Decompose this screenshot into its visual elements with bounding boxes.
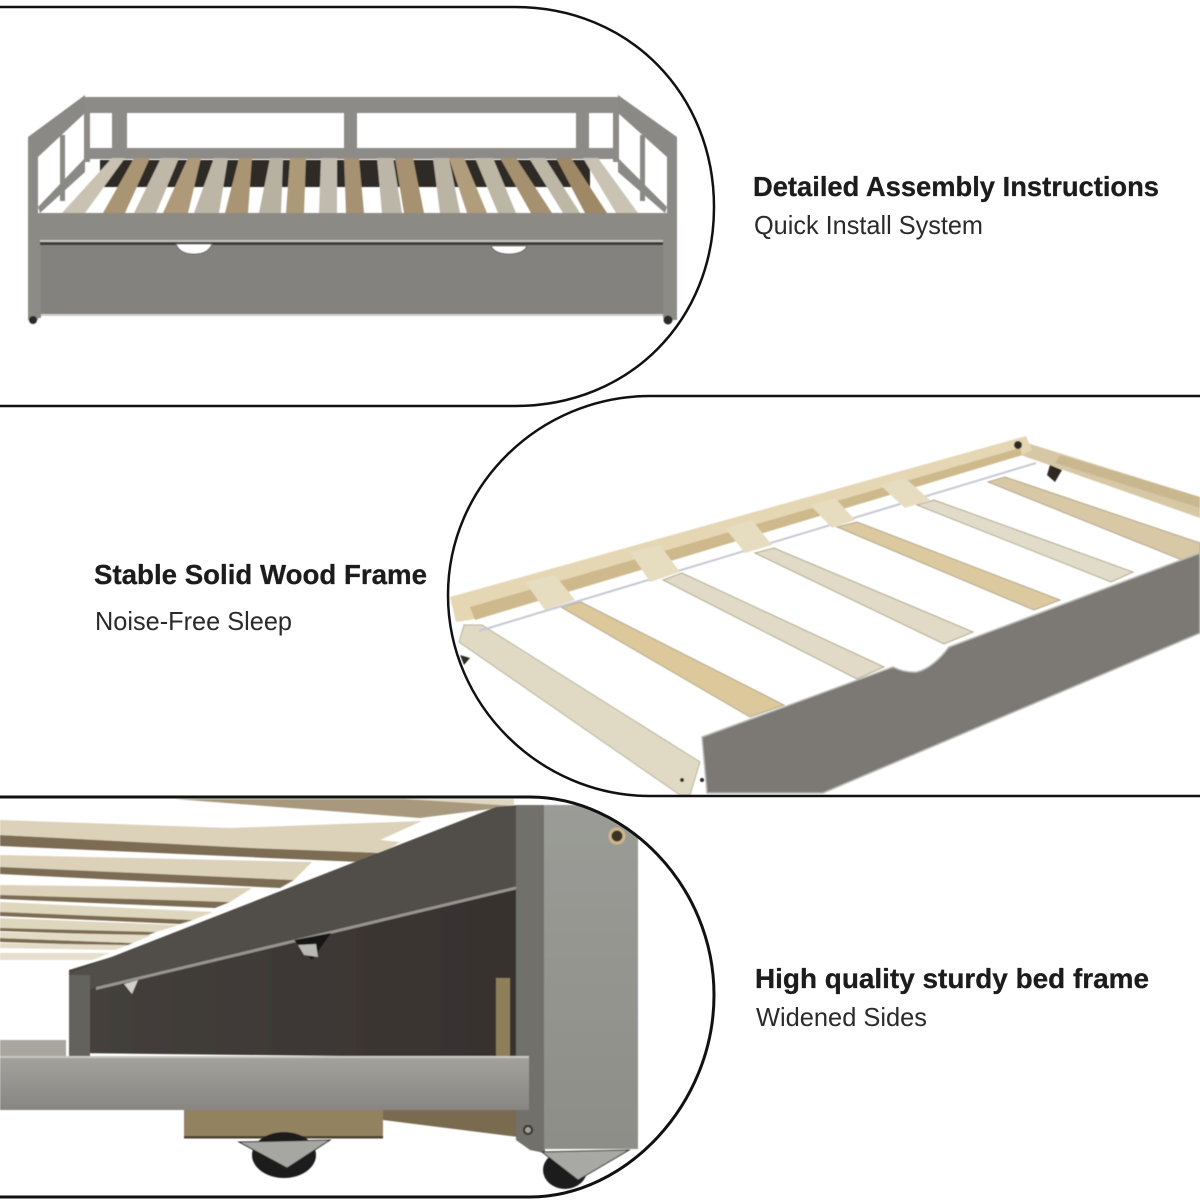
screw: [610, 829, 624, 843]
caster right: [542, 1150, 629, 1189]
cross brackets: [525, 478, 930, 610]
text: solid wood frame: Stable Solid Wood Frame: [94, 559, 427, 590]
far side rail: [1015, 442, 1200, 518]
front legs: [28, 240, 677, 318]
casters: [29, 316, 672, 324]
photo: daybed with trundle: [28, 95, 677, 324]
photo: corner close-up: [0, 799, 638, 1189]
text: sturdy bed frame: High quality sturdy bed frame: [755, 963, 1149, 994]
upper beam: [69, 805, 518, 1000]
leg front: [544, 805, 638, 1149]
left post: [69, 975, 90, 1057]
text: assembly instructions: Detailed Assembly Instructions: [753, 171, 1159, 202]
photo: trundle frame: [450, 436, 1200, 795]
drawer front: [702, 553, 1200, 793]
right side frame: [618, 95, 677, 320]
drawer handles: [176, 244, 212, 254]
panel outline: rounded bottom right: [0, 797, 714, 1197]
left side frame: [28, 95, 85, 320]
panel: assembly instructions: [0, 7, 1159, 406]
bed slats: [62, 158, 638, 213]
text: sturdy bed frame: Widened Sides: [756, 1002, 927, 1032]
text: assembly instructions: Quick Install System: [754, 210, 983, 240]
back rail: [450, 436, 1032, 622]
text: assembly instructions: [753, 171, 1159, 240]
caster left: [239, 1132, 330, 1178]
underside wood: [383, 1110, 518, 1137]
drawer slab: [0, 1040, 66, 1057]
tan bracket: [496, 978, 510, 1058]
slats: [0, 799, 514, 960]
panel outline: rounded left: [448, 396, 1200, 796]
text: solid wood frame: Noise-Free Sleep: [95, 606, 292, 636]
panel: solid wood frame: [94, 396, 1200, 796]
wire line: [479, 463, 1036, 631]
text: solid wood frame: [94, 559, 427, 636]
leg side: [516, 805, 545, 1153]
slats: [561, 477, 1200, 717]
back panel: [68, 888, 517, 1057]
side rail near: [459, 625, 700, 795]
front rail: [0, 1057, 529, 1110]
panel outline: rounded top: [0, 7, 714, 406]
foot bolt: [524, 1126, 532, 1134]
front rail: [28, 213, 677, 243]
text: sturdy bed frame: [755, 963, 1149, 1032]
hanger clips: [124, 933, 331, 994]
panel: sturdy bed frame: [0, 797, 1149, 1197]
hardware dots: [460, 441, 1062, 782]
back rail and posts: [84, 97, 619, 162]
shadow behind slats: [100, 160, 590, 187]
trundle drawer: [40, 240, 663, 316]
